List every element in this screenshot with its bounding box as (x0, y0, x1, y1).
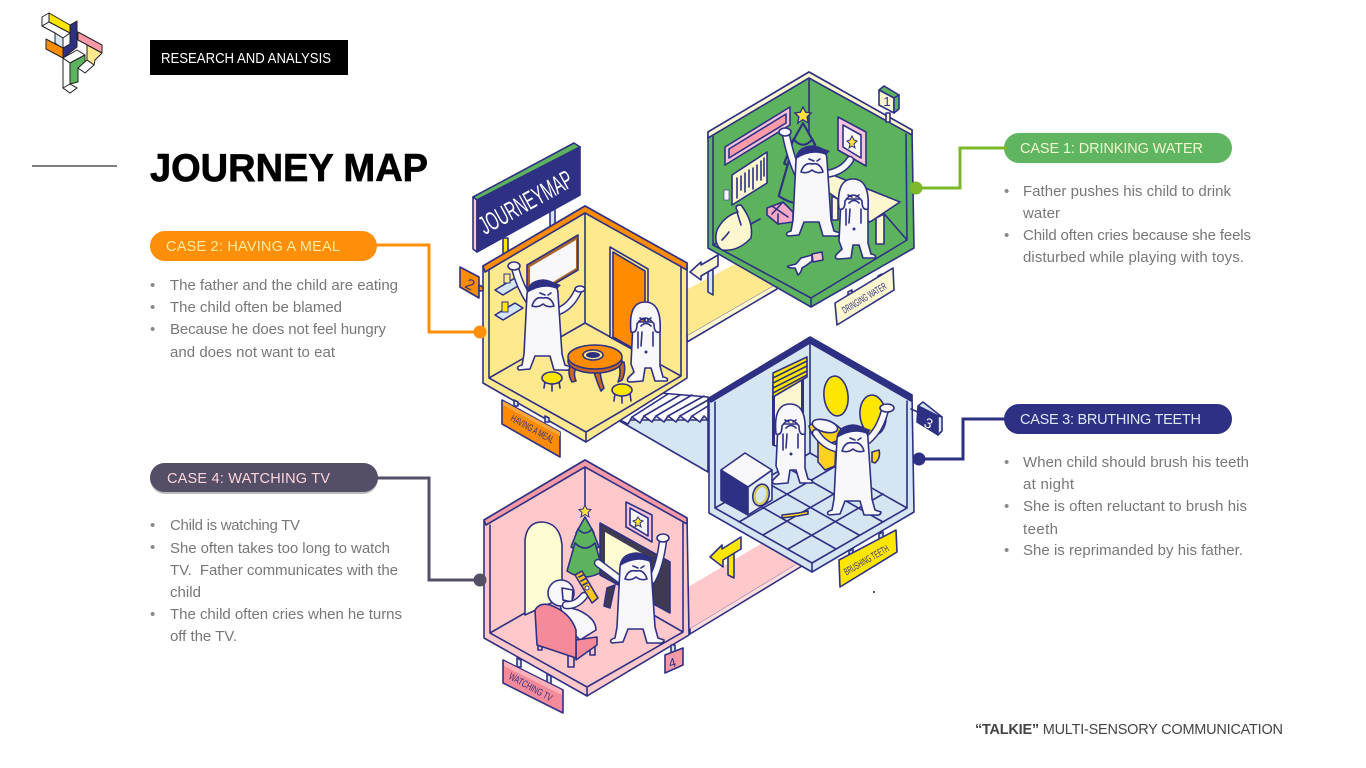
case 4 bullets: The child often cries when he turns (170, 606, 402, 623)
sign: watching tv: WATCHING TV (507, 671, 554, 704)
number tag 4 (665, 645, 683, 673)
room 2: having a meal (460, 143, 687, 457)
room 3 rim (709, 337, 912, 402)
picture frame (626, 502, 652, 542)
round table (568, 345, 625, 391)
child (835, 179, 876, 259)
case 3 bullets: When child should brush his teeth (1023, 454, 1249, 471)
sign: brushing teeth (839, 530, 897, 587)
wall chart (732, 152, 767, 205)
connector: case 3 (914, 419, 1008, 464)
case 4 label: CASE 4: WATCHING TV (167, 471, 330, 487)
number tag 3 (911, 402, 942, 435)
child in armchair (548, 580, 596, 640)
sign: watching tv (503, 658, 563, 713)
case 2 label (150, 231, 377, 261)
arrow sign: pink walkway (710, 537, 741, 578)
case 4 bullets: • (150, 517, 155, 534)
christmas tree (567, 505, 603, 577)
case 4 bullets: Child is watching TV (170, 517, 300, 534)
case 3 bullets: She is often reluctant to brush his (1023, 498, 1247, 515)
window (527, 235, 578, 300)
case 4 bullets: • (150, 539, 155, 556)
case 3 label (1004, 404, 1232, 434)
doorway (772, 369, 804, 456)
footer: “TALKIE” MULTI-SENSORY COMMUNICATION (975, 722, 1283, 738)
journeymap sign (473, 143, 580, 252)
case 1 label: CASE 1: DRINKING WATER (1020, 141, 1203, 157)
number tag 2: 2 (462, 276, 477, 294)
case 4 bullets: TV. Father communicates with the (170, 562, 398, 579)
stools (542, 372, 632, 403)
sack (716, 205, 752, 250)
case 1 bullets: disturbed while playing with toys. (1023, 249, 1244, 266)
child (627, 302, 668, 382)
case 2 bullets: The child often be blamed (170, 299, 342, 316)
room 4: watching tv (484, 460, 689, 713)
number tag 1: 1 (883, 94, 891, 109)
journeymap sign: JOURNEYMAP (473, 164, 578, 240)
louver vent (773, 357, 807, 397)
sign: dringing water (835, 268, 894, 325)
section tag (150, 40, 348, 75)
remote (575, 571, 598, 603)
sign: having a meal: HAVING A MEAL (509, 413, 556, 446)
case 1 bullets: • (1004, 227, 1009, 244)
room 1: drinking water (708, 72, 914, 325)
stray dot (873, 591, 875, 593)
christmas tree (779, 107, 827, 204)
case 1 bullets: Father pushes his child to drink (1023, 183, 1232, 200)
case 2 bullets: Because he does not feel hungry (170, 321, 386, 338)
case 4 bullets: off the TV. (170, 628, 237, 645)
toothbrush (782, 511, 808, 518)
panel: case 1 (1004, 133, 1251, 266)
room 2 rim (483, 206, 687, 272)
case 4 label (150, 463, 378, 494)
case 1 bullets: • (1004, 183, 1009, 200)
case 4 bullets (150, 517, 402, 645)
room 4 rim (484, 460, 687, 525)
title rule (32, 165, 117, 167)
case 1 bullets: water (1022, 205, 1060, 222)
father (508, 262, 585, 370)
case 2 bullets: • (150, 277, 155, 294)
bridge: pink walkway (689, 542, 802, 634)
spilled cup (788, 252, 823, 275)
child (772, 404, 812, 484)
father (779, 128, 850, 236)
case 3 bullets (1004, 454, 1249, 559)
connector: case 4 (375, 478, 485, 585)
sign: having a meal (502, 400, 560, 457)
picture frame (838, 117, 866, 166)
panel: case 2 (150, 231, 398, 361)
title: JOURNEY MAP (150, 147, 428, 190)
case 3 bullets: at night (1023, 476, 1075, 493)
case 2 bullets: • (150, 321, 155, 338)
washing machine (721, 453, 772, 515)
case 3 bullets: teeth (1023, 521, 1058, 538)
shelves (495, 274, 523, 320)
panel: case 3 (1004, 404, 1249, 559)
sign: brushing teeth: BRUSHING TEETH (842, 544, 891, 578)
light switch (724, 190, 729, 200)
case 3 bullets: She is reprimanded by his father. (1023, 542, 1243, 559)
journeymap sign posts (503, 208, 555, 256)
father (598, 534, 669, 643)
connector: case 2 (375, 245, 485, 337)
door (610, 247, 648, 358)
case 2 label: CASE 2: HAVING A MEAL (166, 239, 340, 255)
case 1 bullets (1004, 183, 1251, 266)
case 4 bullets: • (150, 606, 155, 623)
bridge: yellow walkway (687, 262, 777, 342)
case 2 bullets (150, 277, 398, 361)
case 4 bullets: She often takes too long to watch (170, 540, 390, 557)
room 3: brushing teeth (709, 337, 942, 587)
logo (42, 13, 102, 93)
arrow sign: yellow walkway (690, 255, 718, 295)
case 4 bullets: child (170, 584, 201, 601)
connector: case 1 (911, 148, 1008, 193)
panel: case 4 (150, 463, 402, 645)
television (600, 523, 670, 613)
case 3 label: CASE 3: BRUTHING TEETH (1020, 412, 1201, 428)
number tag 1 (879, 86, 899, 122)
bridge: stairs (618, 393, 708, 472)
round mirrors (822, 375, 888, 436)
case 3 bullets: • (1004, 542, 1009, 559)
armchair (535, 604, 597, 667)
case 1 bullets: Child often cries because she feels (1023, 227, 1251, 244)
toilet (809, 417, 880, 470)
gift box (767, 202, 793, 224)
floor tiles (739, 467, 883, 549)
father (816, 404, 894, 515)
number tag 3: 3 (922, 414, 936, 432)
case 2 bullets: • (150, 299, 155, 316)
section tag: RESEARCH AND ANALYSIS (161, 50, 331, 67)
arched door (525, 522, 562, 615)
case 2 bullets: The father and the child are eating (170, 277, 398, 294)
sign: dringing water: DRINGING WATER (840, 281, 889, 316)
case 2 bullets: and does not want to eat (170, 344, 336, 361)
room 1 rim (708, 72, 912, 138)
number tag 4: 4 (667, 655, 678, 671)
case 3 bullets: • (1004, 454, 1009, 471)
table (828, 173, 900, 244)
number tag 2 (460, 267, 483, 298)
case 3 bullets: • (1004, 498, 1009, 515)
case 1 label (1004, 133, 1232, 163)
pink window (725, 107, 790, 165)
